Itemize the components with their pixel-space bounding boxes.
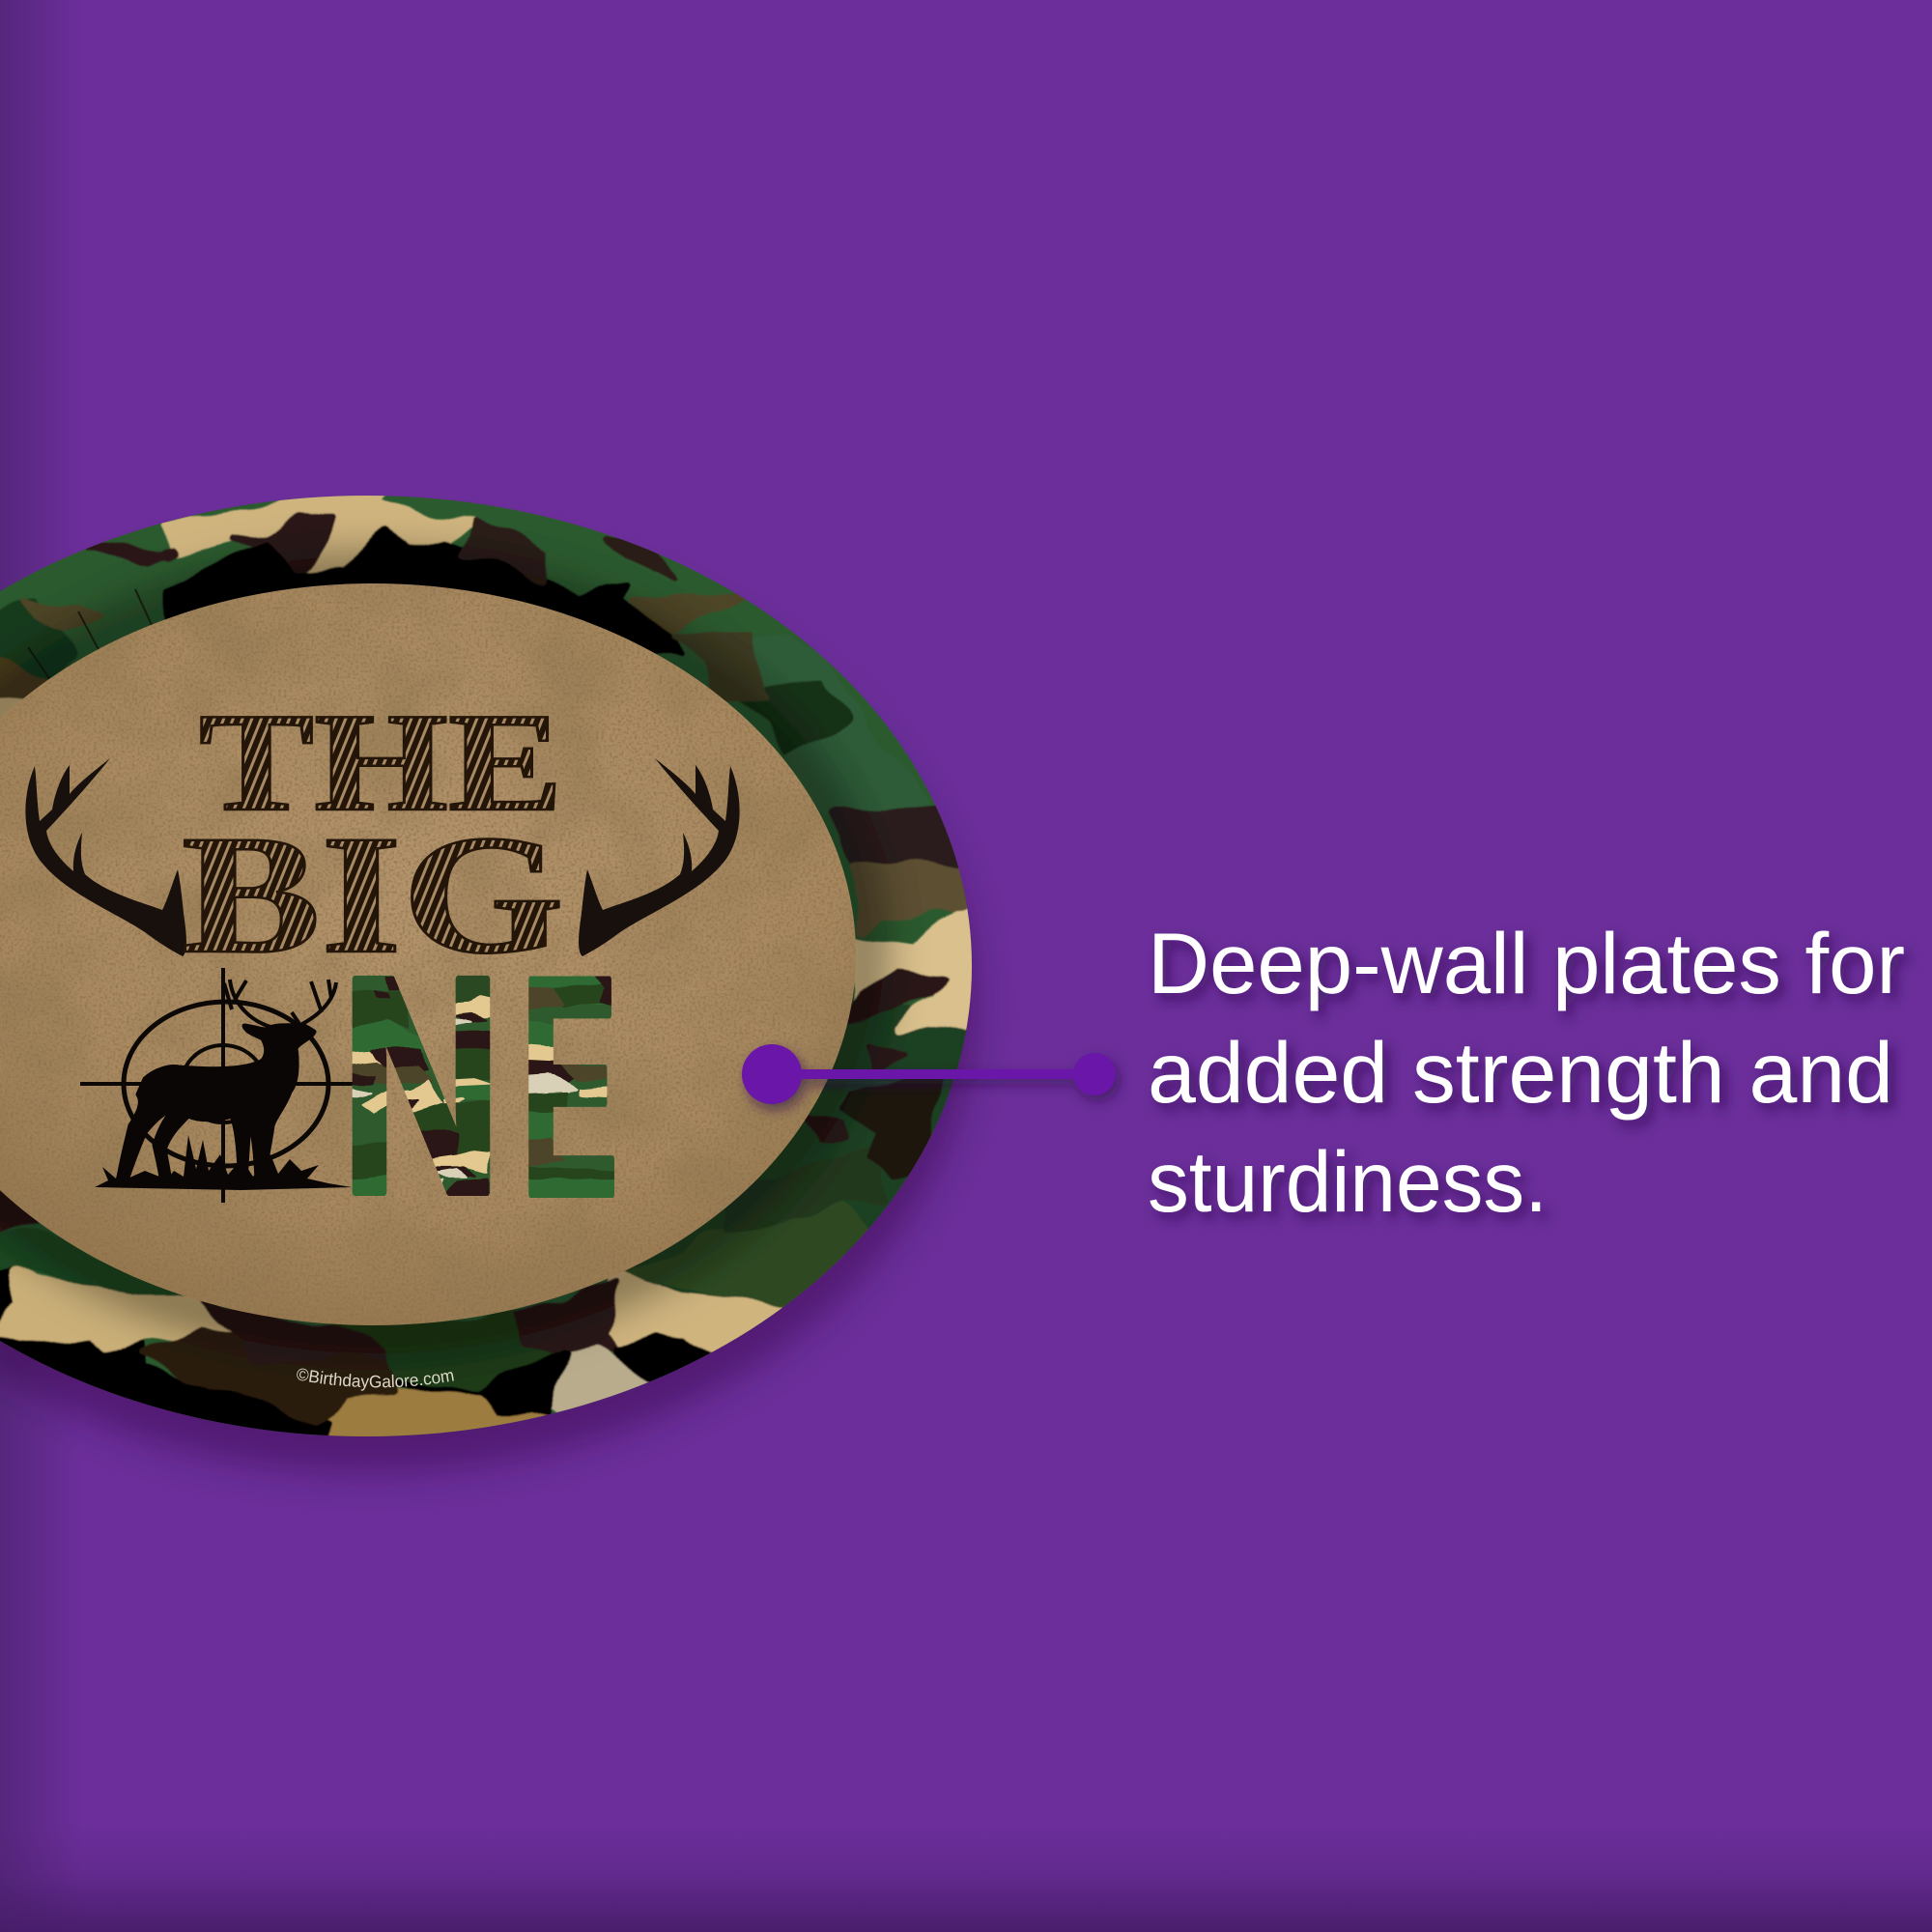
copyright note: ©BirthdayGalore.com <box>297 1368 454 1391</box>
heading: camouflage NE: N <box>340 912 502 1258</box>
callout text: added strength and <box>1148 1024 1893 1121</box>
callout text: sturdiness. <box>1148 1133 1548 1230</box>
plate rim with camouflage print <box>0 496 989 1487</box>
antlers <box>25 758 740 956</box>
heading: THE: THE <box>199 684 563 840</box>
kraft paper centre of the plate <box>0 580 860 1333</box>
heading: BIG: BIG <box>182 801 564 989</box>
callout text: Deep-wall plates for <box>1148 915 1905 1011</box>
callout text <box>1148 915 1905 1230</box>
paper plate <box>0 496 989 1487</box>
paper plate: E <box>521 914 618 1261</box>
icon: deer in rifle scope <box>80 968 374 1203</box>
callout pointer <box>742 1044 1116 1104</box>
